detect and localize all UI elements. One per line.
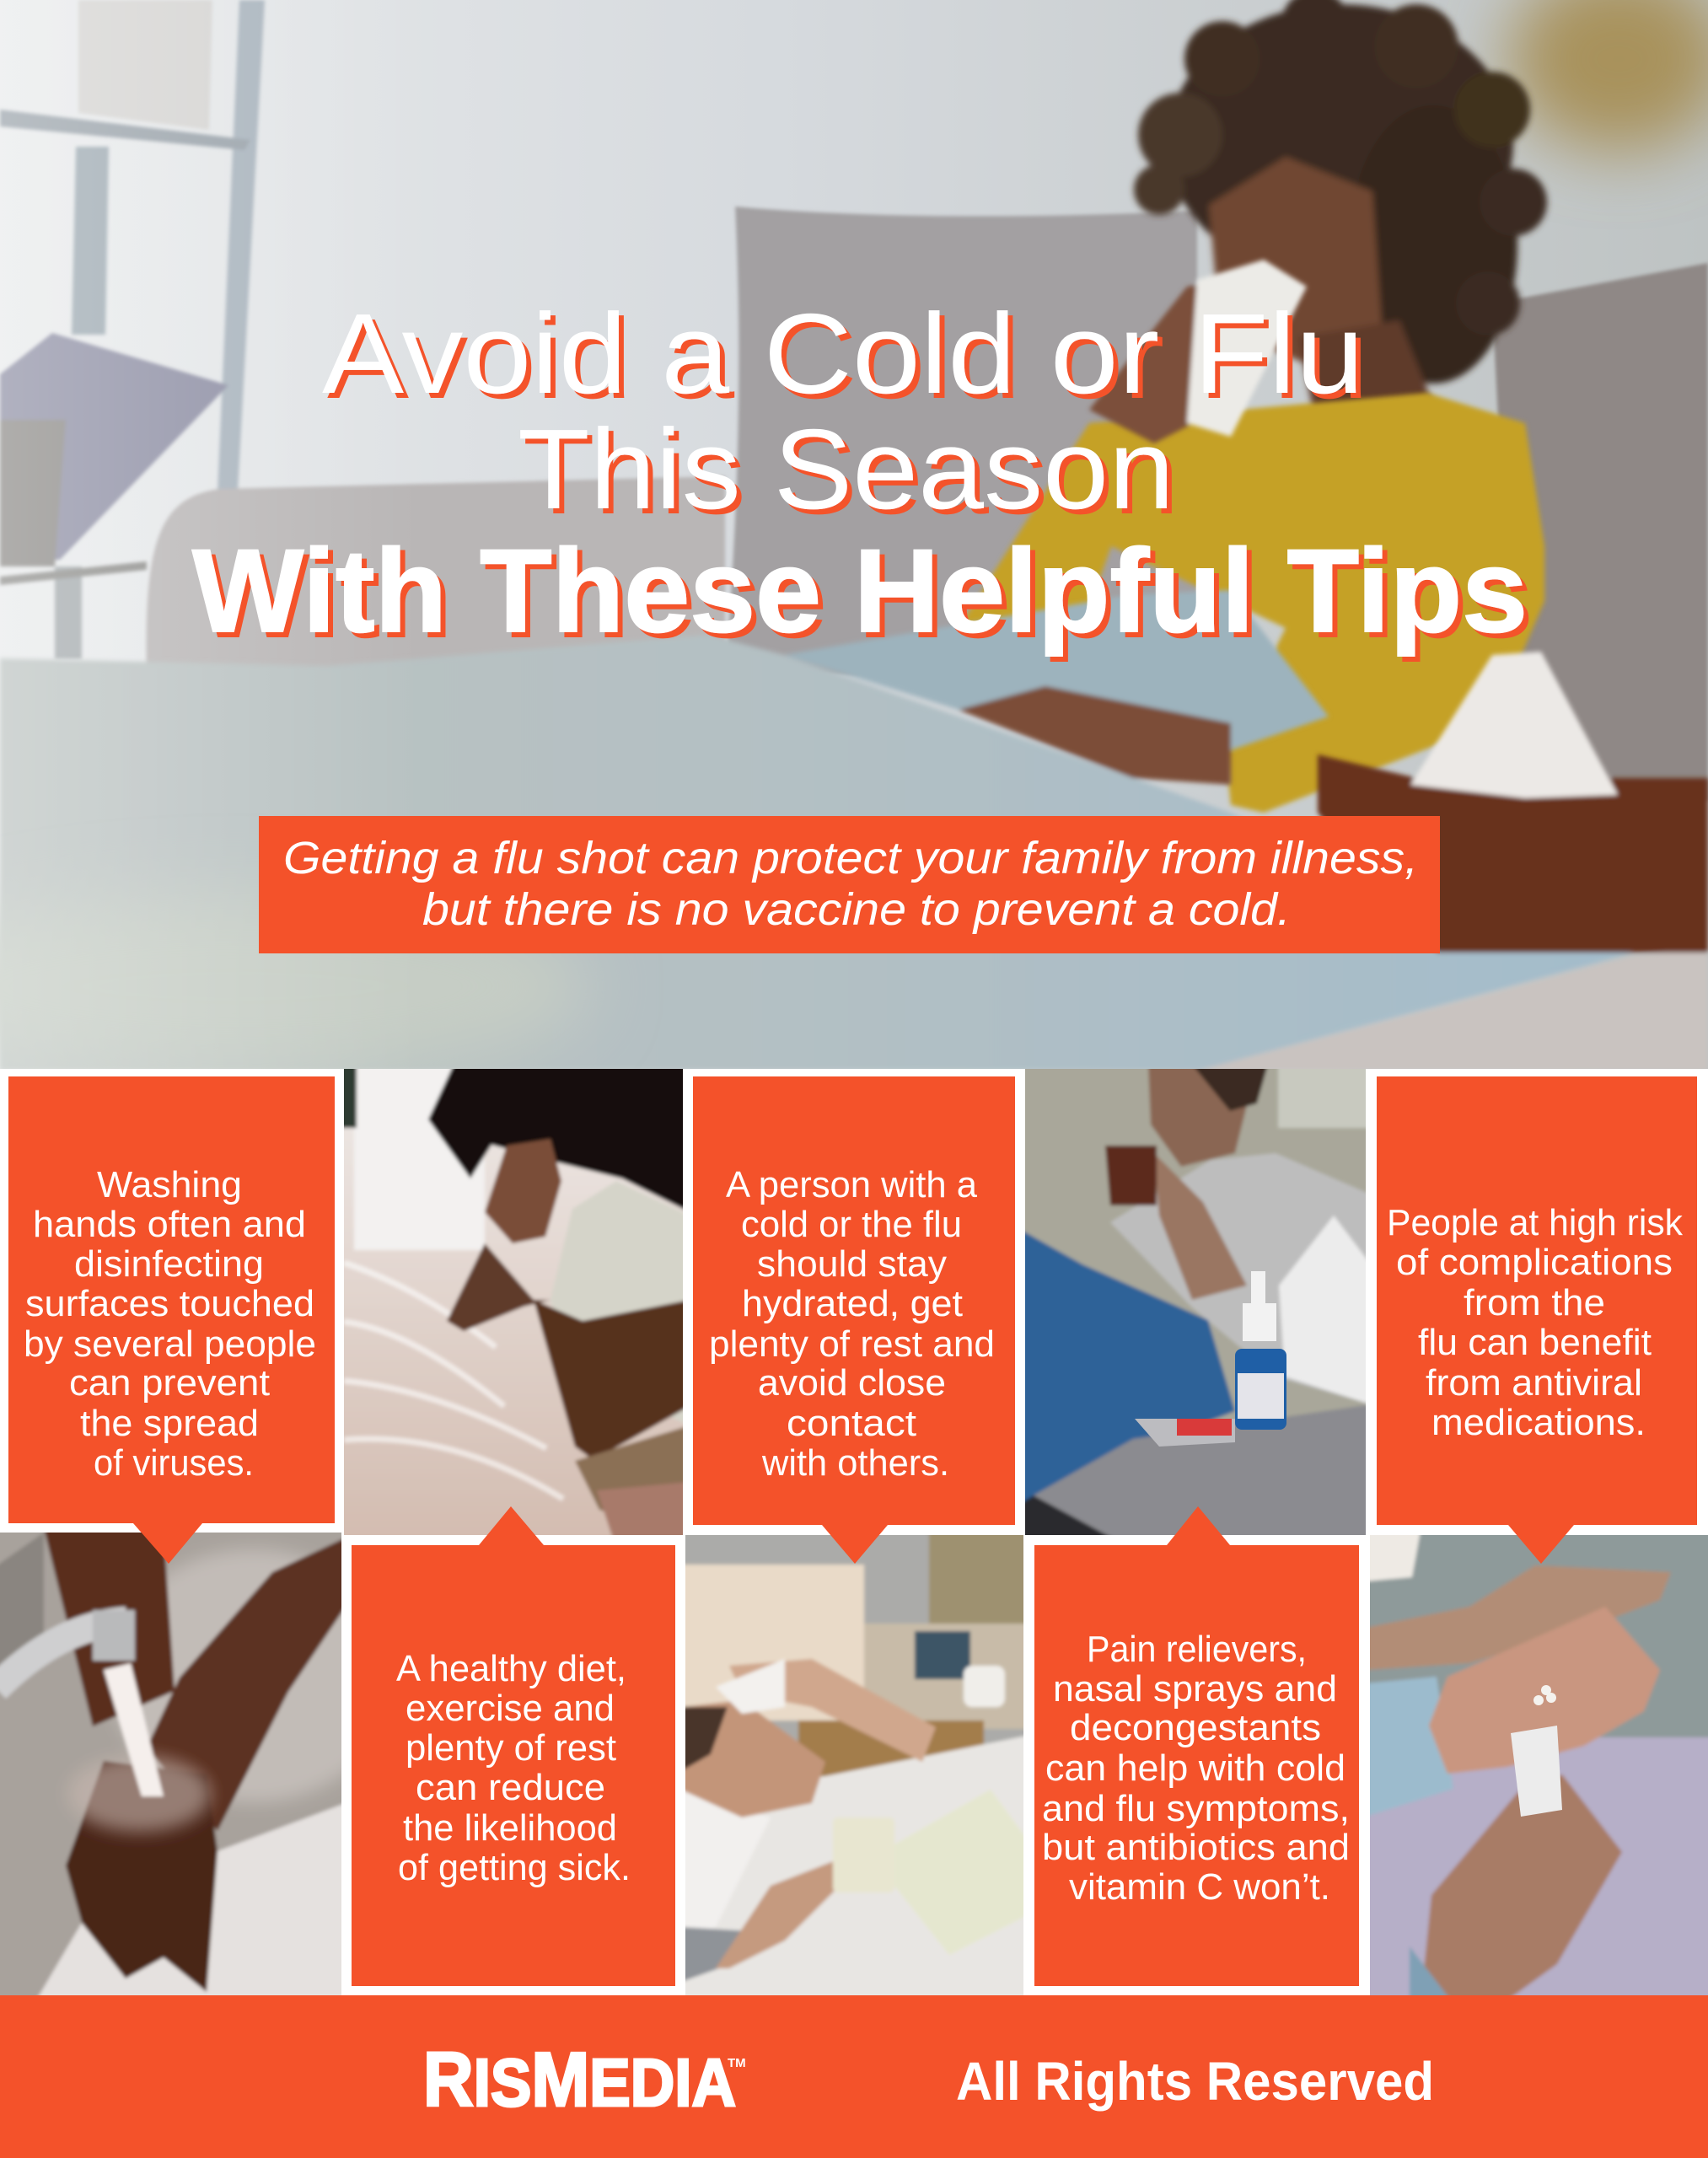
tip box: stay hydrated: cold or the flu [741, 1204, 962, 1245]
white grid background [0, 1069, 1708, 1996]
tip box: stay hydrated: with others. [761, 1442, 949, 1484]
tip box: healthy diet: A healthy diet, [396, 1648, 626, 1689]
tip box: stay hydrated: hydrated, get [742, 1283, 963, 1324]
footer text: All Rights Reserved [956, 2051, 1434, 2112]
tip box: healthy diet: exercise and [406, 1688, 615, 1729]
tip box: washing hands: Washing [97, 1164, 242, 1205]
tip box: washing hands: by several people [24, 1323, 316, 1365]
tip box: healthy diet [352, 1506, 675, 1986]
tip box: antiviral medications: from the [1464, 1282, 1605, 1323]
tip box: pain relievers: nasal sprays and [1053, 1668, 1337, 1710]
photo: man with tea and medicine [1025, 1069, 1366, 1535]
tip box: pain relievers: can help with cold [1045, 1747, 1345, 1789]
photo: woman sleeping [344, 1069, 683, 1535]
tip box: healthy diet: the likelihood [403, 1807, 617, 1849]
tip box: stay hydrated: contact [787, 1403, 916, 1444]
title: With These Helpful Tips [192, 524, 1528, 657]
tip box: washing hands [8, 1076, 335, 1564]
subtitle banner [259, 816, 1440, 953]
tip box: washing hands: of viruses. [94, 1442, 254, 1484]
subtitle banner: Getting a flu shot can protect your family from illness, [283, 833, 1418, 883]
tip box: healthy diet: plenty of rest [406, 1727, 616, 1769]
tip box: pain relievers: vitamin C won’t. [1069, 1866, 1330, 1908]
logo: RISMedia: RISMEDIA [423, 2037, 736, 2123]
tip box: antiviral medications: flu can benefit [1418, 1322, 1652, 1363]
tip box: stay hydrated: should stay [757, 1243, 947, 1285]
tip box: antiviral medications: from antiviral [1426, 1362, 1642, 1404]
tip box: pain relievers [1034, 1506, 1359, 1986]
tip box: pain relievers: but antibiotics and [1042, 1827, 1350, 1868]
tip box: pain relievers: decongestants [1070, 1707, 1321, 1748]
tip box: washing hands: hands often and [33, 1204, 306, 1245]
title [192, 290, 1528, 657]
photo: elderly hands with pills [1370, 1535, 1708, 1995]
tip box: stay hydrated: A person with a [726, 1164, 978, 1205]
tip box: pain relievers: and flu symptoms, [1042, 1788, 1350, 1829]
tip box: stay hydrated: plenty of rest and [709, 1323, 995, 1365]
tip box: antiviral medications: of complications [1396, 1242, 1673, 1283]
tip box: washing hands: surfaces touched [25, 1283, 314, 1324]
photo: hands washing under faucet [0, 1533, 341, 1995]
tip box: washing hands: the spread [80, 1403, 259, 1444]
tip box: pain relievers: Pain relievers, [1087, 1629, 1307, 1670]
tip box: washing hands: can prevent [69, 1362, 270, 1404]
tip box: antiviral medications [1377, 1076, 1697, 1564]
footer bar [0, 1995, 1708, 2158]
tip box: healthy diet: of getting sick. [398, 1847, 631, 1888]
tip box: stay hydrated [693, 1076, 1015, 1564]
tip box: healthy diet: can reduce [416, 1767, 605, 1808]
logo: RISMedia: TM [728, 2056, 746, 2070]
tip box: washing hands: disinfecting [74, 1243, 264, 1285]
title: Avoid a Cold or Flu [322, 290, 1364, 417]
photo: sick man resting in bed [685, 1535, 1023, 1995]
subtitle banner: but there is no vaccine to prevent a cold. [422, 884, 1291, 935]
title: This Season [518, 405, 1174, 533]
hero photo: woman blowing her nose on a sofa [0, 0, 1708, 1069]
tip box: antiviral medications: medications. [1431, 1402, 1646, 1443]
tip box: stay hydrated: avoid close [758, 1362, 946, 1404]
tip box: antiviral medications: People at high risk [1387, 1202, 1684, 1243]
